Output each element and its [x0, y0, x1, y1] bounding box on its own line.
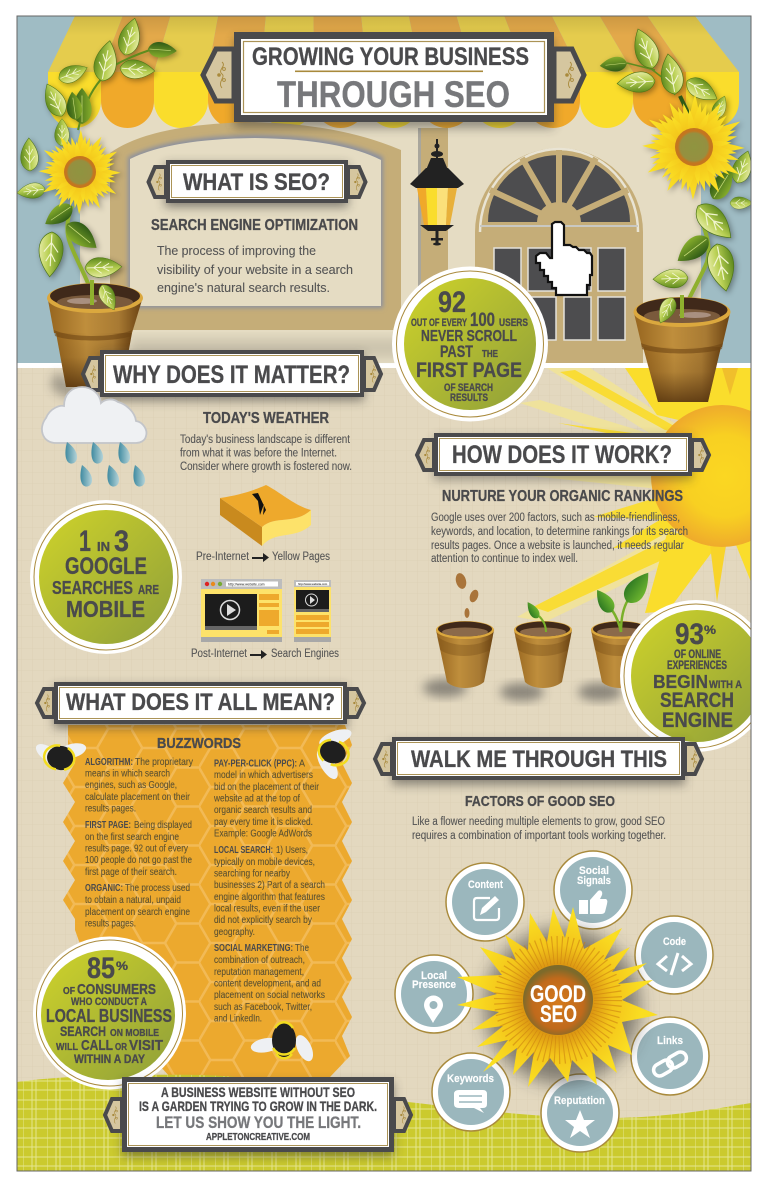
text: search engine optimization	[151, 217, 358, 295]
text: buzzwords left column: FIRST PAGE:	[85, 819, 131, 831]
right flower pot	[634, 295, 730, 402]
text: buzzwords right column: combination of outreach,	[214, 954, 305, 966]
callout: 85 percent: SEARCH	[60, 1024, 106, 1039]
text: factors of good SEO: FACTORS OF GOOD SEO	[465, 793, 615, 810]
callout: 92 out of 100 users: THE	[482, 349, 498, 360]
text: buzzwords right column: LOCAL SEARCH:	[214, 844, 273, 856]
text: buzzwords right column: bid on the placement of their	[214, 781, 319, 793]
text: buzzwords left column: results pages.	[85, 918, 136, 930]
text: buzzwords left column: Being displayed	[134, 819, 192, 831]
good SEO sunflower	[457, 907, 658, 1087]
callout: 92 out of 100 users: FIRST PAGE	[416, 359, 522, 382]
background: sky	[17, 16, 751, 366]
callout: 93 percent: ENGINE	[662, 709, 733, 732]
callout: 85 percent: WILL	[56, 1042, 78, 1053]
heading: what does it all mean: WHAT DOES IT ALL MEAN?	[66, 689, 335, 716]
text: factors of good SEO	[412, 793, 666, 842]
pot: seed	[423, 621, 494, 697]
callout: 93 percent: BEGIN	[653, 671, 708, 692]
text: buzzwords right column: pay every time it is clicked.	[214, 816, 313, 828]
text: buzzwords right column: PAY-PER-CLICK (PPC):	[214, 758, 297, 770]
right vine with sunflower	[600, 28, 750, 298]
factor circle: code	[635, 916, 713, 994]
factor circle: reputation	[541, 1074, 619, 1152]
text: buzzwords right column: engine algorithm that features	[214, 891, 325, 903]
text: nurture your organic rankings: keywords, and location, to determine rankings for its search	[431, 526, 688, 538]
callout: 92 out of 100 users	[392, 266, 548, 422]
text: buzzwords left column: results page. 92 out of every	[85, 842, 189, 854]
factor circle: content: Content	[468, 879, 503, 891]
text: buzzwords right column: such as Facebook, Twitter,	[214, 1001, 312, 1013]
text: buzzwords left column: ORGANIC:	[85, 882, 123, 894]
callout: 85 percent: CALL	[81, 1037, 113, 1054]
text: search engine optimization: SEARCH ENGINE OPTIMIZATION	[151, 217, 358, 234]
factor circle: keywords: Keywords	[447, 1073, 494, 1085]
icon: mobile browser: http://www.website.com	[298, 582, 328, 586]
text: buzzwords right column: Example: Google AdWords	[214, 828, 312, 840]
text: buzzwords right column: SOCIAL MARKETING:	[214, 942, 293, 954]
icon: bee top right	[304, 717, 359, 785]
callout: 92 out of 100 users: 100	[470, 310, 495, 331]
callout: 1 in 3 google searches: IN	[97, 539, 110, 554]
door	[475, 148, 643, 363]
callout: 85 percent: WITHIN A DAY	[74, 1054, 145, 1066]
callout: 1 in 3 google searches: ARE	[138, 582, 159, 597]
callout: 92 out of 100 users: NEVER SCROLL	[421, 328, 517, 345]
plaque: closing message	[105, 1077, 411, 1157]
door panes	[494, 248, 625, 340]
text: nurture your organic rankings	[431, 488, 688, 565]
text: nurture your organic rankings: Google uses over 200 factors, such as mobile-friendliness,	[431, 512, 680, 524]
text: buzzwords left column: The process used	[125, 882, 190, 894]
text: buzzwords right column: typically on mobile devices,	[214, 856, 315, 868]
text: buzzwords left column: to obtain a natural, unpaid	[85, 894, 181, 906]
icon: falling seeds	[456, 573, 478, 618]
callout: 85 percent: LOCAL BUSINESS	[46, 1006, 172, 1026]
callout: 1 in 3 google searches: 3	[114, 525, 129, 558]
factor circle: social signals: Social	[579, 865, 609, 877]
plaque: what is SEO	[148, 160, 366, 207]
left flower pot	[47, 280, 143, 398]
text: closing lines: A BUSINESS WEBSITE WITHOUT SEO	[161, 1084, 355, 1100]
text: buzzwords right column: placement on social networks	[214, 989, 325, 1001]
icon: lantern	[410, 139, 464, 246]
text: buzzwords right column: businesses 2) Part of a search	[214, 879, 325, 891]
title: through SEO: THROUGH SEO	[277, 74, 510, 115]
store awning	[48, 16, 739, 128]
text: closing lines: APPLETONCREATIVE.COM	[206, 1131, 310, 1143]
callout: 85 percent: %	[116, 959, 128, 973]
factor circle: content	[446, 863, 524, 941]
sunflower left	[39, 130, 121, 214]
text: today's weather: from what it was before the Internet.	[180, 448, 337, 460]
door pillar	[418, 128, 448, 286]
callout: 85 percent: OR	[115, 1042, 128, 1053]
callout: 92 out of 100 users: OF SEARCH	[444, 382, 493, 394]
text: today's weather: Consider where growth is fostered now.	[180, 461, 352, 473]
text: buzzwords left column: on the first search engine	[85, 831, 179, 843]
icon: desktop browser	[201, 579, 282, 642]
caption: pre-internet yellow pages: Pre-Internet	[196, 551, 250, 563]
text: buzzwords left column: engines, such as Google,	[85, 779, 177, 791]
text: closing lines: LET US SHOW YOU THE LIGHT.	[156, 1113, 361, 1132]
background: floor	[17, 364, 751, 1174]
panel: what is SEO window frame	[110, 122, 401, 330]
callout: 92 out of 100 users: PAST	[440, 342, 473, 361]
callout: 92 out of 100 users: OUT OF EVERY	[411, 317, 467, 329]
callout: 85 percent: CONSUMERS	[77, 981, 156, 998]
callout: 93 percent: %	[704, 623, 716, 637]
plaque: why does it matter	[83, 350, 381, 401]
pot: sprout	[500, 600, 572, 701]
text: buzzwords left column: calculate placement on their	[85, 791, 190, 803]
text: buzzwords right column: organic search results and	[214, 804, 312, 816]
text: search engine optimization: The process of improving the	[157, 243, 316, 258]
text: search engine optimization: engine's natural search results.	[157, 280, 330, 295]
heading: why does it matter: WHY DOES IT MATTER?	[113, 361, 350, 389]
text: buzzwords right column: content development, and ad	[214, 978, 321, 990]
icon: rain cloud	[42, 387, 146, 487]
callout: 1 in 3 google searches: GOOGLE	[65, 553, 147, 580]
plaque: what does it all mean	[37, 682, 364, 728]
text: buzzwords right column: did not explicitly search by	[214, 914, 313, 926]
text: factors of good SEO: requires a combination of important tools working together.	[412, 830, 666, 842]
text: today's weather: TODAY'S WEATHER	[203, 410, 329, 427]
callout: 1 in 3 google searches	[30, 500, 182, 654]
factor circle: local presence	[395, 955, 473, 1033]
plaque: walk me through this	[375, 737, 702, 785]
callout: 85 percent: 85	[87, 952, 115, 985]
callout: 93 percent	[620, 600, 768, 752]
text: buzzwords left column: results pages.	[85, 802, 136, 814]
left vine with sunflower	[16, 16, 177, 305]
caption: pre-internet yellow pages: Yellow Pages	[272, 551, 330, 563]
text: nurture your organic rankings: results pages. Once a website is launched, it needs regular	[431, 540, 684, 552]
text: buzzwords left column	[85, 756, 194, 930]
text: today's weather: Today's business landscape is different	[180, 434, 351, 446]
text: buzzwords right column: geography.	[214, 926, 255, 938]
callout: 92 out of 100 users: 92	[438, 286, 466, 319]
text: buzzwords left column: placement on search engine	[85, 906, 190, 918]
callout: 93 percent: WITH A	[709, 679, 742, 691]
arched door window	[488, 150, 630, 222]
text: buzzwords right column: website ad at the top of	[213, 792, 300, 804]
good SEO sunflower: SEO	[540, 1001, 577, 1028]
text: buzzwords right column: reputation management,	[214, 966, 304, 978]
text: buzzwords right column	[213, 758, 325, 1024]
factor circle: reputation: Reputation	[554, 1095, 605, 1107]
sunflower right	[642, 94, 745, 200]
caption: post-internet search engines: Post-Internet	[191, 648, 248, 660]
factor circle: social signals: Signals	[577, 875, 611, 887]
callout: 1 in 3 google searches: SEARCHES	[52, 578, 133, 598]
icon: mobile browser	[294, 580, 331, 642]
callout: 85 percent: WHO CONDUCT A	[71, 996, 147, 1008]
icon: desktop browser: http://www.website.com	[228, 582, 265, 586]
caption: post-internet search engines	[191, 648, 339, 660]
building facade	[80, 70, 701, 363]
text: nurture your organic rankings: attention to continue to index well.	[431, 553, 578, 565]
text: buzzwords left column: means in which search	[85, 768, 170, 780]
callout: 1 in 3 google searches: MOBILE	[66, 596, 145, 622]
floor shadow below window	[130, 338, 410, 358]
icon: bee top left	[30, 732, 90, 774]
factor circle: social signals	[554, 851, 632, 929]
callout: 1 in 3 google searches: 1	[79, 525, 91, 558]
icon: bee bottom	[250, 1022, 317, 1064]
good SEO sunflower: GOOD	[530, 981, 586, 1008]
factor circle: links: Links	[657, 1035, 683, 1047]
text: buzzwords right column: A	[299, 758, 305, 770]
text: buzzwords left column: first page of their search.	[85, 866, 177, 878]
callout: 93 percent: EXPERIENCES	[667, 660, 727, 672]
callout: 85 percent	[33, 936, 186, 1090]
text: factors of good SEO: Like a flower needing multiple elements to grow, good SEO	[412, 816, 665, 828]
text: closing lines: IS A GARDEN TRYING TO GROW IN THE DARK.	[139, 1098, 377, 1114]
heading: how does it work: HOW DOES IT WORK?	[452, 441, 672, 469]
main title plaque	[203, 32, 584, 128]
callout: 93 percent: OF ONLINE	[674, 649, 721, 661]
sun disc	[651, 405, 750, 547]
pot: seedling	[578, 567, 656, 701]
factor circle: local presence: Local	[421, 970, 447, 982]
text: buzzwords left column: 100 people do not go past the	[85, 854, 192, 866]
text: buzzwords right column: local results, even if the user	[214, 902, 320, 914]
factor circle: links	[631, 1017, 709, 1095]
grass strip	[17, 1075, 751, 1175]
heading: what is SEO: WHAT IS SEO?	[183, 169, 330, 196]
honeycomb panel	[63, 725, 352, 1077]
heading: walk me through this: WALK ME THROUGH THIS	[411, 746, 667, 773]
factor circle: local presence: Presence	[412, 979, 456, 991]
plaque: how does it work	[417, 433, 709, 480]
title: growing your business: GROWING YOUR BUSINESS	[252, 43, 529, 71]
text: buzzwords right column: 1) Users,	[276, 844, 308, 856]
icon: yellow pages book	[220, 485, 311, 546]
callout: 85 percent: VISIT	[129, 1037, 163, 1054]
text: buzzwords right column: searching for nearby	[214, 868, 291, 880]
plant pots with sprouts	[423, 567, 656, 701]
text: today's weather	[180, 410, 352, 473]
caption: post-internet search engines: Search Engines	[271, 648, 339, 660]
text: buzzwords right column: The	[295, 942, 309, 954]
factor circle: keywords	[432, 1053, 510, 1131]
text: buzzwords right column: and LinkedIn.	[214, 1012, 262, 1024]
factor circle: code: Code	[663, 936, 686, 948]
callout: 85 percent: OF	[63, 986, 75, 997]
text: buzzwords right column: model in which advertisers	[214, 769, 313, 781]
text: buzzwords left column: The proprietary	[135, 756, 194, 768]
callout: 92 out of 100 users: USERS	[499, 317, 528, 329]
text: nurture your organic rankings: NURTURE YOUR ORGANIC RANKINGS	[442, 488, 683, 505]
callout: 93 percent: SEARCH	[660, 689, 734, 712]
text: search engine optimization: visibility of your website in a search	[157, 262, 353, 277]
icon: cursor hand	[536, 222, 592, 295]
callout: 93 percent: 93	[675, 618, 704, 651]
callout: 85 percent: ON MOBILE	[110, 1028, 159, 1039]
sun with rays	[517, 368, 768, 622]
caption: pre-internet yellow pages	[196, 551, 330, 563]
text: closing lines	[139, 1084, 377, 1143]
callout: 92 out of 100 users: RESULTS	[450, 392, 488, 404]
heading: buzzwords: BUZZWORDS	[157, 735, 241, 752]
text: buzzwords left column: ALGORITHM:	[85, 756, 133, 768]
